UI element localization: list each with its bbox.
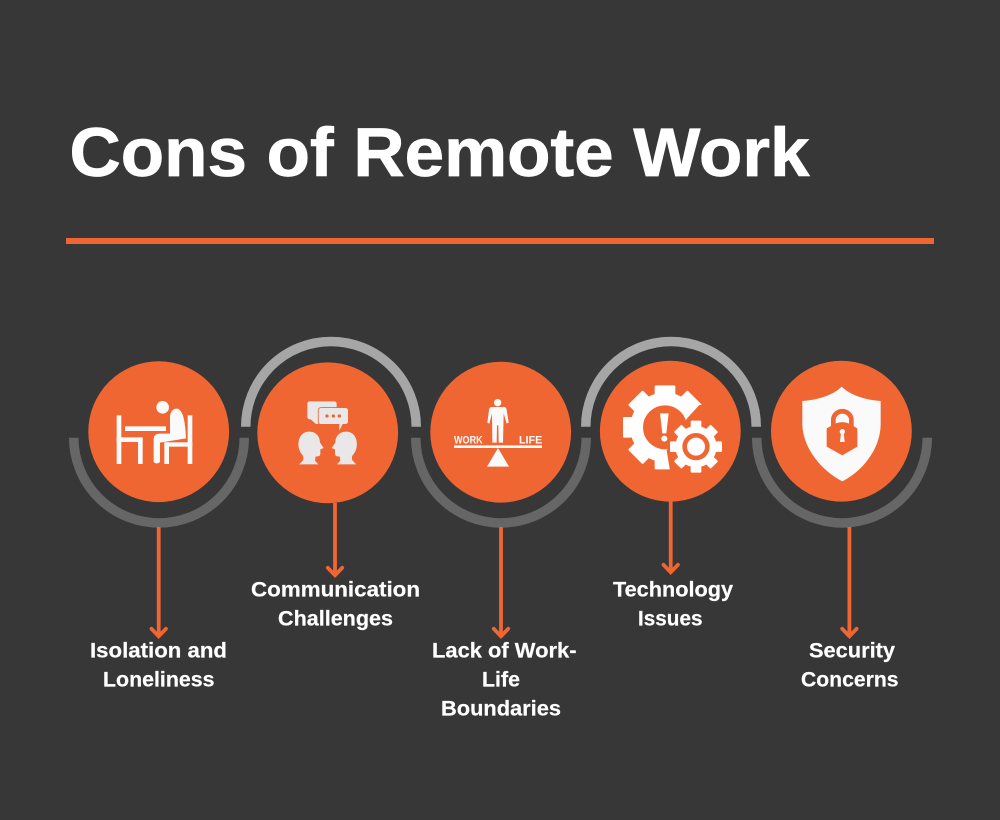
lower arc 5 <box>757 438 927 523</box>
icon: work-life balance <box>454 399 542 467</box>
circle 4 <box>600 361 741 502</box>
icon: person slumped at desk <box>117 401 192 464</box>
circle 3 <box>430 362 571 503</box>
label 3: Lack of Work- <box>432 640 577 663</box>
circle 2 <box>257 362 398 503</box>
label 3: Boundaries <box>441 698 561 721</box>
label 1: Loneliness <box>103 669 214 692</box>
label 5: Security <box>809 640 895 663</box>
label 3: Life <box>482 669 520 692</box>
arrow 1 <box>152 527 166 636</box>
arrow 2 <box>328 503 342 575</box>
label 4 <box>613 579 733 631</box>
arrow 5 <box>842 527 857 636</box>
icon: work-life balance: LIFE <box>519 434 542 446</box>
circle 5 <box>771 361 912 502</box>
label 5: Concerns <box>801 669 898 692</box>
arrow 3 <box>494 527 508 636</box>
lower arc 3 <box>416 438 586 523</box>
step 4: technology issues <box>586 341 756 631</box>
step 1: isolation and loneliness <box>74 361 244 692</box>
step 3: lack of work-life boundaries <box>416 362 586 721</box>
arrow 4 <box>664 501 678 572</box>
circle 1 <box>88 361 229 502</box>
label 2: Challenges <box>278 608 393 631</box>
upper arc 4 <box>586 341 756 427</box>
icon: work-life balance: WORK <box>454 434 483 446</box>
label 4: Issues <box>638 608 702 631</box>
icon: two heads talking <box>298 401 357 464</box>
icon: gears with warning mark <box>623 385 727 477</box>
label 1: Isolation and <box>90 640 227 663</box>
label 4: Technology <box>613 579 733 602</box>
step 5: security concerns <box>757 361 927 692</box>
label 2: Communication <box>251 579 420 602</box>
label 1 <box>90 640 227 692</box>
label 5 <box>801 640 898 692</box>
label 2 <box>251 579 420 631</box>
step 2: communication challenges <box>246 341 420 631</box>
title underline <box>66 238 934 244</box>
upper arc 2 <box>246 341 416 427</box>
label 3 <box>432 640 577 721</box>
lower arc 1 <box>74 438 244 523</box>
icon: shield with padlock <box>802 387 881 481</box>
title: Cons of Remote Work <box>70 114 810 191</box>
